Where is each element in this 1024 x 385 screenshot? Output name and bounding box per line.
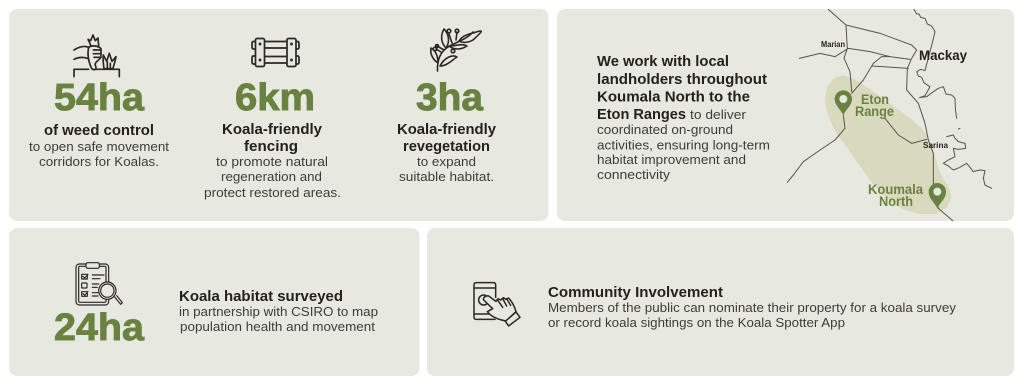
- stat: 6km: 6km: [235, 77, 315, 119]
- text block: community involvement: Members of the public can nominate their property for a koala survey: [548, 300, 957, 315]
- text block: fencing: regeneration and: [221, 169, 322, 184]
- text block: weed control: to open safe movement: [29, 139, 169, 154]
- text block: landholders: Koumala North to the: [597, 90, 750, 106]
- text block: landholders: connectivity: [597, 167, 671, 182]
- text block: revegetation: revegetation: [403, 139, 490, 155]
- text block: fencing: protect restored areas.: [204, 185, 341, 200]
- map label: Eton Range: Eton: [861, 92, 889, 107]
- map label: Eton Range: Range: [855, 104, 894, 119]
- text block: revegetation: [397, 122, 496, 184]
- text block: community involvement: [548, 285, 957, 330]
- map: habitat corridor: [827, 77, 949, 212]
- text block: weed control: [29, 123, 169, 169]
- icon: hand tapping phone: [474, 283, 520, 326]
- icon: clipboard with magnifier: [76, 263, 122, 305]
- map label: Marian: Marian: [821, 40, 845, 49]
- map label: Sarina: Sarina: [923, 141, 949, 150]
- text block: landholders: coordinated on-ground: [597, 122, 733, 137]
- map label: Mackay: Mackay: [919, 47, 967, 63]
- text block: landholders: We work with local: [597, 54, 729, 70]
- text block: landholders: landholders throughout: [597, 72, 767, 88]
- text block: landholders: habitat improvement and: [597, 152, 746, 167]
- map pin: Koumala North: [929, 183, 946, 208]
- text block: landholders: activities, ensuring long-term: [597, 138, 770, 152]
- panel: landholders and map: [557, 9, 1014, 221]
- text block: survey: [179, 289, 378, 334]
- icon: fence: [252, 38, 299, 66]
- text block: community involvement: Community Involvement: [548, 285, 723, 301]
- text block: fencing: fencing: [244, 139, 298, 155]
- text block: survey: Koala habitat surveyed: [179, 289, 343, 305]
- map: region: [787, 9, 992, 221]
- stat: 24ha: 24ha: [54, 307, 145, 349]
- text block: landholders: [597, 54, 770, 182]
- text block: landholders: Eton Ranges: [597, 107, 686, 123]
- text block: survey: population health and movement: [180, 319, 375, 334]
- text block: weed control: of weed control: [44, 123, 154, 139]
- map label: Koumala North: [868, 182, 923, 209]
- text block: fencing: [204, 122, 341, 200]
- icon: hand pulling weed: [74, 35, 119, 77]
- text block: fencing: to promote natural: [216, 154, 328, 169]
- map: roads: [787, 9, 953, 221]
- text block: survey: in partnership with CSIRO to map: [179, 304, 378, 319]
- text block: revegetation: suitable habitat.: [399, 169, 494, 184]
- stat: 54ha: 54ha: [54, 77, 145, 119]
- text block: fencing: Koala-friendly: [222, 122, 322, 138]
- text block: weed control: corridors for Koalas.: [39, 154, 159, 169]
- panel: community involvement: [427, 228, 1014, 376]
- icon: eucalyptus branch: [431, 29, 481, 71]
- map pin: Eton Range: [835, 90, 852, 115]
- map label: Eton Range: [855, 92, 894, 119]
- map label: Koumala North: Koumala: [868, 182, 923, 197]
- text block: landholders: to deliver: [690, 107, 747, 122]
- text block: community involvement: or record koala sightings on the Koala Spotter App: [548, 315, 845, 330]
- panel: habitat survey: [9, 228, 420, 376]
- text block: revegetation: to expand: [417, 154, 476, 169]
- map label: Koumala North: North: [879, 194, 913, 209]
- text block: revegetation: Koala-friendly: [397, 122, 496, 138]
- panel: on-ground results: [9, 9, 548, 221]
- stat: 3ha: 3ha: [416, 77, 484, 119]
- map: coastline: [914, 9, 992, 188]
